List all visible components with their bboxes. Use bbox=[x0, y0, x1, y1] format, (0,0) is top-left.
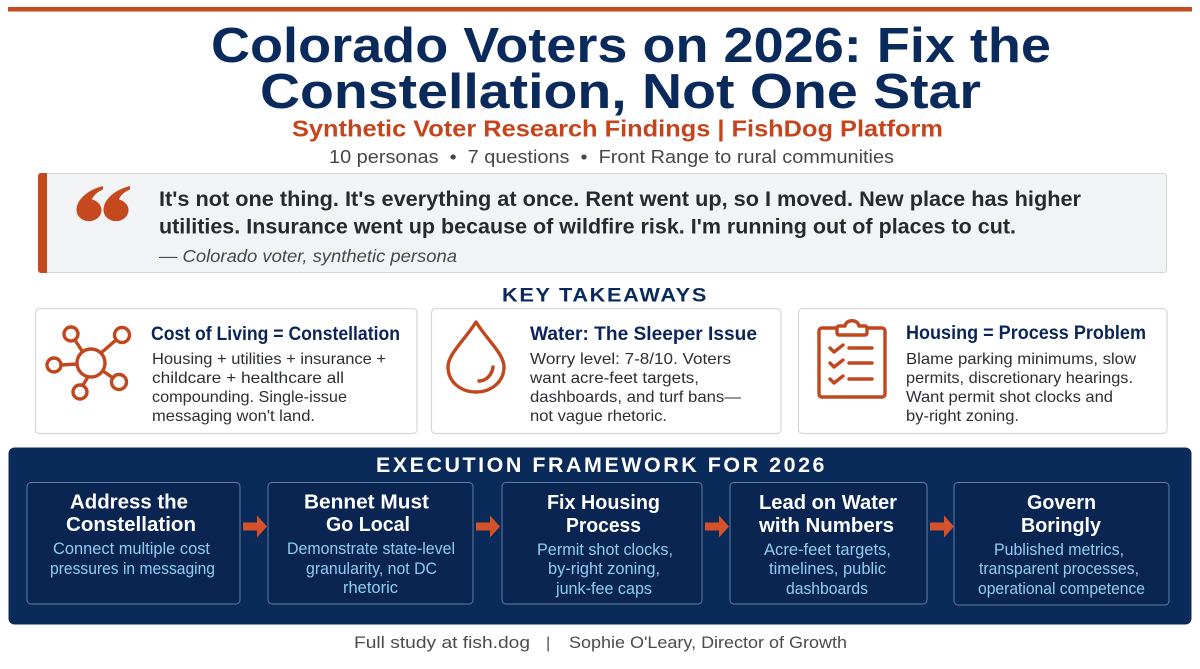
step 2: granularity, not DC bbox=[306, 560, 437, 578]
step 2: Demonstrate state-level bbox=[287, 540, 455, 558]
card body: compounding. Single-issue bbox=[152, 389, 347, 406]
subtitle: Synthetic Voter Research Findings | FishDog Platform bbox=[292, 116, 943, 142]
footer: Sophie O'Leary, Director of Growth bbox=[569, 634, 847, 652]
step 2 bbox=[268, 482, 473, 604]
step 5: operational competence bbox=[978, 580, 1145, 598]
icon: quotation mark bbox=[76, 186, 130, 221]
card body: permits, discretionary hearings. bbox=[906, 370, 1133, 387]
step 1 bbox=[27, 482, 240, 604]
card body: Want permit shot clocks and bbox=[906, 389, 1113, 406]
quote attribution: — Colorado voter, synthetic persona bbox=[158, 246, 457, 266]
card body: Blame parking minimums, slow bbox=[906, 351, 1136, 368]
card body: childcare + healthcare all bbox=[152, 370, 344, 387]
step 1: Constellation bbox=[66, 513, 196, 536]
step 5: Govern bbox=[1027, 491, 1096, 514]
step 3: Permit shot clocks, bbox=[537, 541, 673, 559]
arrow 4 bbox=[930, 516, 954, 538]
step 4: Acre-feet targets, bbox=[764, 541, 891, 559]
meta line: 10 personas • 7 questions • Front Range to rural communities bbox=[329, 147, 894, 167]
panel: housing bbox=[798, 308, 1167, 434]
card body: not vague rhetoric. bbox=[530, 408, 667, 425]
step 4: with Numbers bbox=[758, 514, 894, 537]
step 5 bbox=[954, 482, 1169, 605]
quote accent bar bbox=[38, 173, 47, 273]
arrow 1 bbox=[243, 516, 267, 538]
title bbox=[211, 19, 1051, 119]
panel: quote bbox=[38, 173, 1166, 273]
card body: want acre-feet targets, bbox=[529, 370, 699, 387]
step 2: rhetoric bbox=[343, 579, 398, 597]
card body bbox=[529, 351, 741, 425]
arrow 2 bbox=[476, 516, 500, 538]
quote text: utilities. Insurance went up because of wildfire risk. I'm running out of places to cut. bbox=[159, 216, 1016, 238]
icon: water drop bbox=[448, 322, 504, 392]
footer: | bbox=[546, 635, 550, 652]
icon: clipboard checklist bbox=[819, 321, 885, 397]
panel: execution framework bbox=[8, 448, 1192, 624]
card body bbox=[152, 351, 386, 425]
top accent bar bbox=[8, 7, 1192, 12]
card body: Housing + utilities + insurance + bbox=[152, 351, 386, 368]
step 3: Fix Housing bbox=[547, 491, 660, 514]
step 3: Process bbox=[566, 514, 641, 537]
step 3 bbox=[502, 482, 702, 604]
title: Colorado Voters on 2026: Fix the bbox=[211, 19, 1051, 73]
step 4: timelines, public bbox=[769, 560, 886, 578]
step 5: Published metrics, bbox=[994, 541, 1124, 559]
step 4: dashboards bbox=[786, 580, 868, 598]
quote text bbox=[159, 188, 1081, 238]
footer: Full study at fish.dog bbox=[354, 634, 530, 652]
step 5: transparent processes, bbox=[979, 560, 1139, 578]
card heading: Cost of Living = Constellation bbox=[151, 323, 400, 345]
footer bbox=[354, 634, 847, 652]
step 1: pressures in messaging bbox=[50, 560, 215, 578]
card heading: Water: The Sleeper Issue bbox=[530, 323, 757, 345]
step 2: Bennet Must bbox=[304, 490, 429, 514]
step 2: Go Local bbox=[326, 513, 410, 536]
card body: by-right zoning. bbox=[906, 408, 1019, 425]
step 4 bbox=[730, 482, 927, 604]
step 5: Boringly bbox=[1021, 514, 1102, 537]
card body bbox=[906, 351, 1136, 425]
arrow 3 bbox=[705, 516, 729, 538]
step 3: junk-fee caps bbox=[555, 580, 652, 598]
card body: Worry level: 7-8/10. Voters bbox=[530, 351, 731, 368]
card heading: Housing = Process Problem bbox=[906, 322, 1146, 344]
card body: dashboards, and turf bans— bbox=[530, 389, 741, 406]
icon: constellation network bbox=[47, 327, 130, 399]
title: Constellation, Not One Star bbox=[260, 65, 981, 119]
card body: messaging won't land. bbox=[152, 408, 315, 425]
panel: cost of living bbox=[36, 308, 417, 434]
step 1: Connect multiple cost bbox=[53, 540, 210, 558]
step 4: Lead on Water bbox=[759, 491, 897, 514]
panel: water bbox=[432, 308, 781, 434]
heading: key takeaways: KEY TAKEAWAYS bbox=[502, 284, 708, 306]
step 3: by-right zoning, bbox=[548, 560, 660, 578]
heading: execution framework: EXECUTION FRAMEWORK FOR 2026 bbox=[376, 454, 827, 477]
step 1: Address the bbox=[70, 490, 188, 514]
quote text: It's not one thing. It's everything at once. Rent went up, so I moved. New place has higher bbox=[159, 188, 1081, 211]
